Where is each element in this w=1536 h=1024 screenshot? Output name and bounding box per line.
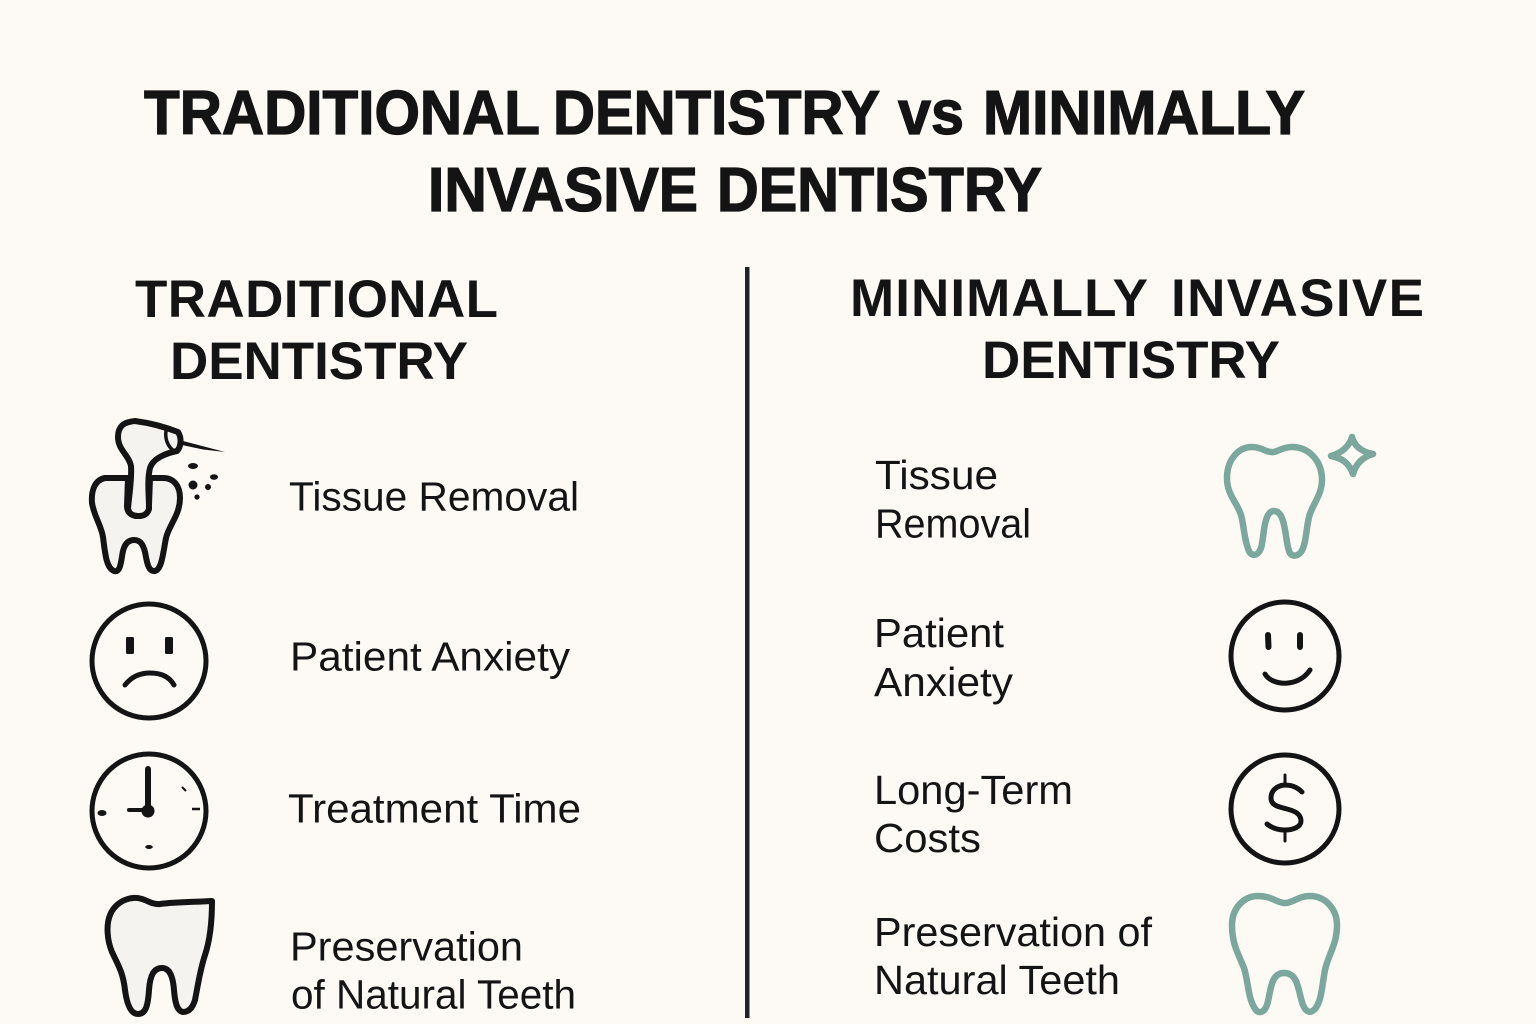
label: tissue removal: Tissue [875,452,998,498]
icon: worn tooth [108,898,212,1014]
label: treatment time: Treatment Time [288,786,581,832]
label: patient anxiety: Anxiety [874,659,1014,705]
title: MINIMALLY [983,79,1305,148]
title: INVASIVE [428,156,698,225]
heading: traditional dentistry: TRADITIONAL [135,270,498,329]
title: DENTISTRY [717,156,1042,225]
label: patient anxiety [874,610,1014,705]
heading: minimally invasive dentistry: MINIMALLY [850,269,1148,328]
title: vs [898,79,964,148]
label: preservation of natural teeth: Natural Teeth [874,957,1120,1003]
heading: minimally invasive dentistry [850,269,1424,390]
title [144,79,1305,225]
label: preservation of natural teeth: of Natural Teeth [291,972,576,1018]
label: tissue removal: Removal [875,500,1031,546]
center divider [745,267,750,1018]
icon: healthy tooth [1232,896,1337,1012]
heading: traditional dentistry [135,270,498,391]
label: preservation of natural teeth [874,909,1153,1003]
label: preservation of natural teeth [290,924,576,1018]
icon: happy face [1231,602,1339,710]
label: patient anxiety: Patient [874,610,1005,656]
title: TRADITIONAL [144,79,540,148]
icon: drill on tooth [92,421,225,571]
icon: tooth with sparkle [1227,437,1373,556]
heading: minimally invasive dentistry: INVASIVE [1171,269,1424,328]
label: long-term costs: Costs [874,815,981,861]
icon: clock [92,754,206,868]
label: long-term costs [874,767,1073,861]
label: preservation of natural teeth: Preservation [290,924,523,970]
label: tissue removal: Tissue Removal [289,474,579,520]
icon: dollar coin [1231,755,1339,863]
label: long-term costs: Long-Term [874,767,1073,813]
icon: sad face [92,604,206,718]
label: preservation of natural teeth: Preservation of [874,909,1153,955]
title: DENTISTRY [553,79,880,148]
panel: minimally invasive dentistry [874,437,1373,1012]
heading: minimally invasive dentistry: DENTISTRY [982,331,1280,390]
label: patient anxiety: Patient Anxiety [290,634,571,680]
panel: traditional dentistry [92,421,581,1018]
label: tissue removal [875,452,1031,546]
heading: traditional dentistry: DENTISTRY [170,332,468,391]
